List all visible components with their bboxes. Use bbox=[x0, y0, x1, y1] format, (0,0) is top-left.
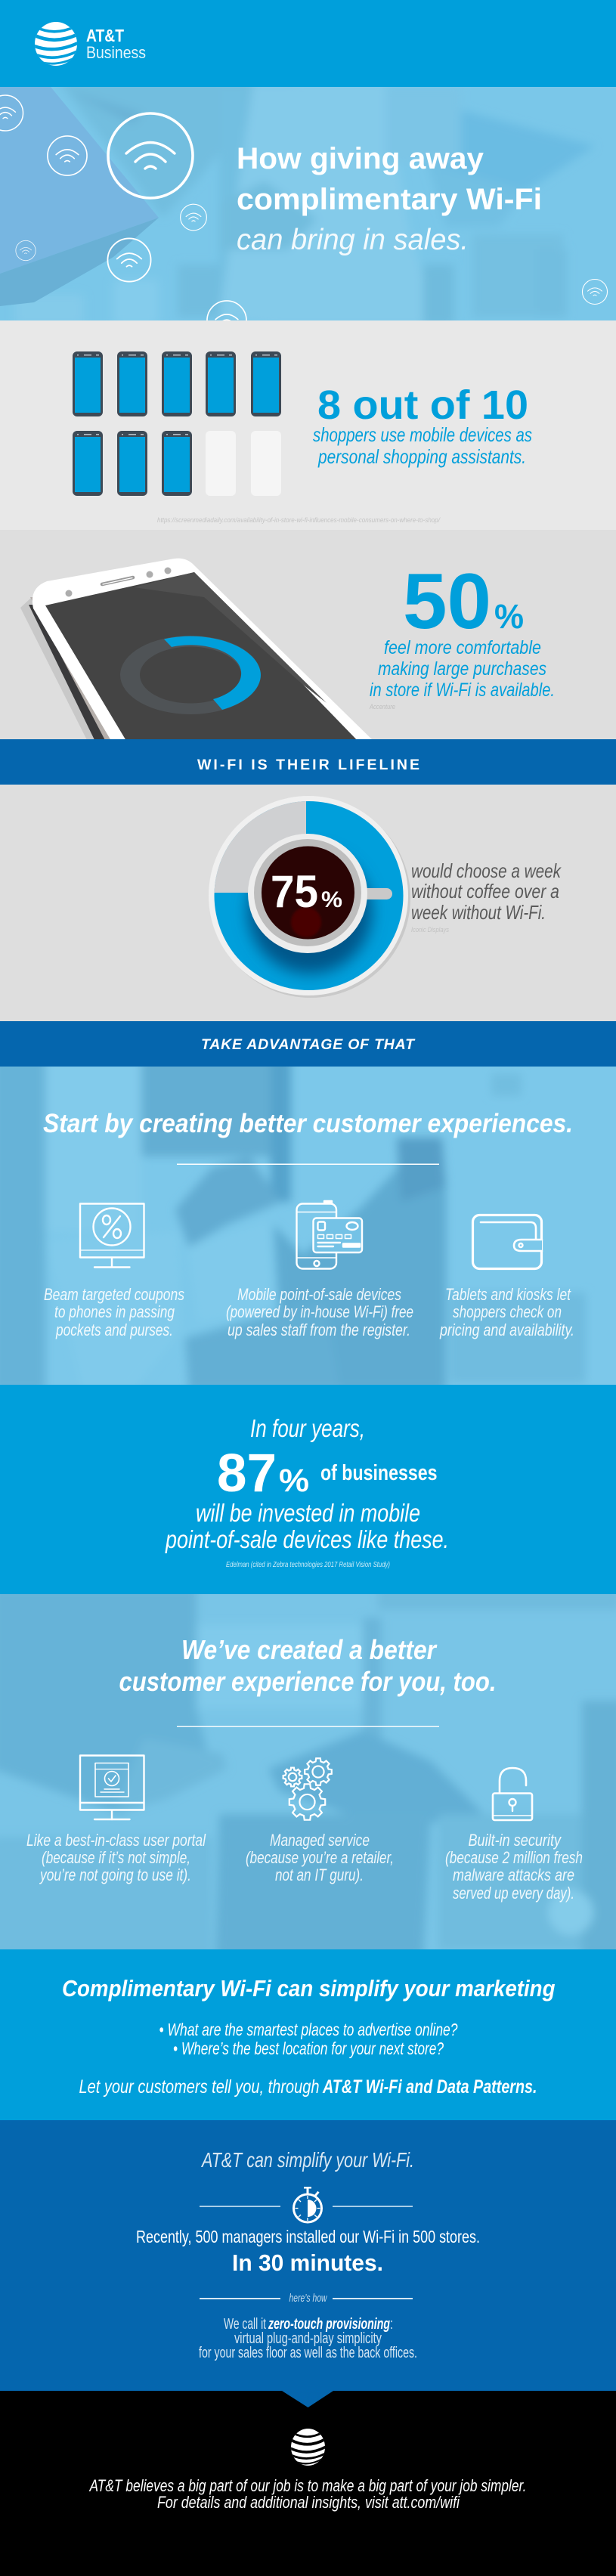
icon: wallet bbox=[473, 1215, 542, 1268]
coffee cup pie chart bbox=[209, 796, 410, 998]
panel: 75 percent coffee stat bbox=[0, 785, 616, 1021]
caption bbox=[411, 859, 562, 924]
subhead: AT&T can simplify your Wi-Fi. bbox=[200, 2148, 414, 2172]
intro line: In four years, bbox=[250, 1414, 365, 1442]
panel: 87 percent stat bbox=[0, 1385, 616, 1594]
stat caption bbox=[313, 423, 532, 468]
how it works: virtual plug-and-play simplicity bbox=[234, 2330, 382, 2347]
title: How giving away bbox=[237, 142, 484, 175]
questions: • Where’s the best location for your next store? bbox=[173, 2039, 444, 2058]
caption: without coffee over a bbox=[411, 880, 559, 903]
big number: % bbox=[279, 1463, 309, 1499]
captions: malware attacks are bbox=[453, 1865, 574, 1884]
closing text: For details and additional insights, visit att.com/wifi bbox=[157, 2493, 460, 2512]
logo wordmark: AT&T bbox=[86, 26, 124, 45]
captions: (because you’re a retailer, bbox=[246, 1848, 394, 1867]
panel: simplify your wi-fi bbox=[0, 2120, 616, 2391]
donut chart: 50 percent bbox=[120, 636, 261, 714]
questions bbox=[159, 2020, 458, 2058]
caption: will be invested in mobile bbox=[196, 1499, 420, 1527]
icon: mobile point-of-sale bbox=[296, 1201, 362, 1268]
captions bbox=[26, 1831, 583, 1903]
big number: 50 bbox=[403, 558, 491, 646]
icon: coupon on monitor bbox=[80, 1203, 144, 1267]
banner: wi-fi is their lifeline bbox=[0, 739, 616, 785]
captions: Managed service bbox=[270, 1831, 370, 1850]
cup handle bbox=[355, 888, 392, 899]
captions: Mobile point-of-sale devices bbox=[237, 1285, 401, 1304]
big number: 87 bbox=[217, 1444, 277, 1503]
captions: up sales staff from the register. bbox=[228, 1321, 410, 1339]
logo: AT&T globe bbox=[291, 2429, 325, 2466]
source: Edelman (cited in Zebra technologies 2017 Retail Vision Study) bbox=[226, 1561, 390, 1569]
stat heading: 8 out of 10 bbox=[317, 382, 528, 428]
panel: marketing bbox=[0, 1949, 616, 2120]
call to action bbox=[79, 2076, 537, 2098]
captions: not an IT guru). bbox=[275, 1865, 364, 1884]
wifi icons bbox=[0, 69, 608, 305]
call to action: Let your customers tell you, through bbox=[79, 2076, 319, 2098]
cup percent: 75 bbox=[271, 866, 318, 917]
source: Iconic Displays bbox=[411, 926, 449, 934]
stat caption: personal shopping assistants. bbox=[317, 445, 526, 468]
captions: (because 2 million fresh bbox=[445, 1848, 583, 1867]
how it works: We call it bbox=[224, 2316, 266, 2333]
how it works: : bbox=[390, 2316, 393, 2333]
captions: (because if it’s not simple, bbox=[42, 1848, 190, 1867]
cup bbox=[248, 834, 367, 953]
title bbox=[237, 142, 542, 256]
captions: (powered by in-house Wi-Fi) free bbox=[226, 1302, 413, 1321]
captions: pockets and purses. bbox=[55, 1321, 173, 1339]
questions: • What are the smartest places to advertise online? bbox=[159, 2020, 458, 2039]
panel: footer bbox=[89, 2391, 525, 2511]
banner: take advantage of that bbox=[0, 1021, 616, 1067]
title: complimentary Wi-Fi bbox=[237, 183, 542, 216]
large phone illustration bbox=[20, 559, 377, 745]
captions: served up every day). bbox=[453, 1884, 574, 1903]
caption: in store if Wi-Fi is available. bbox=[370, 680, 555, 701]
banner: take advantage of that: TAKE ADVANTAGE OF THAT bbox=[201, 1036, 416, 1053]
caption: making large purchases bbox=[378, 658, 546, 680]
heading: Start by creating better customer experiences. bbox=[43, 1109, 573, 1138]
captions: shoppers check on bbox=[453, 1302, 562, 1321]
captions: Tablets and kiosks let bbox=[445, 1285, 571, 1304]
panel: better customer experiences bbox=[0, 1058, 616, 1391]
captions: you’re not going to use it). bbox=[39, 1865, 191, 1884]
heading: Complimentary Wi-Fi can simplify your marketing bbox=[62, 1975, 556, 2002]
title: can bring in sales. bbox=[237, 224, 469, 256]
heading bbox=[119, 1634, 496, 1697]
divider bbox=[177, 1164, 439, 1165]
source: https://screenmediadaily.com/availability-of-in-store-wi-fi-influences-mobile-consumers-on-where-to-shop/ bbox=[157, 516, 441, 525]
stat caption: shoppers use mobile devices as bbox=[313, 423, 532, 446]
wifi icon clipped at section top bbox=[206, 300, 247, 320]
arrow: pointer bbox=[282, 2391, 333, 2407]
caption: would choose a week bbox=[411, 859, 562, 882]
call to action: AT&T Wi-Fi and Data Patterns. bbox=[322, 2076, 537, 2098]
panel: better customer experience for you bbox=[0, 1587, 616, 1958]
closing text bbox=[88, 2476, 527, 2512]
caption bbox=[165, 1499, 449, 1553]
source: Accenture bbox=[369, 703, 395, 711]
caption: week without Wi-Fi. bbox=[411, 901, 546, 924]
30 minutes: In 30 minutes. bbox=[232, 2249, 383, 2276]
captions: to phones in passing bbox=[54, 1302, 175, 1321]
panel: 50 percent stat bbox=[0, 530, 616, 745]
how it works: zero-touch provisioning bbox=[268, 2316, 390, 2333]
panel: hero bbox=[0, 69, 616, 325]
hero background photo (tinted) bbox=[0, 79, 616, 325]
logo wordmark bbox=[86, 26, 146, 62]
background photo (tinted) bbox=[0, 1587, 616, 1958]
how it works: for your sales floor as well as the back offices. bbox=[199, 2345, 417, 2361]
big number bbox=[217, 1444, 437, 1503]
background photo (tinted) bbox=[0, 1058, 616, 1391]
captions: Beam targeted coupons bbox=[44, 1285, 184, 1304]
icon: user portal monitor bbox=[80, 1755, 144, 1819]
stopwatch divider bbox=[200, 2187, 413, 2222]
icon: padlock bbox=[493, 1768, 532, 1820]
logo wordmark: Business bbox=[86, 43, 146, 62]
panel: 8 out of 10 stat bbox=[0, 301, 616, 530]
logo: AT&T globe bbox=[35, 22, 77, 66]
cup percent: % bbox=[321, 887, 342, 912]
icon: gears bbox=[283, 1758, 332, 1820]
captions: Built-in security bbox=[469, 1831, 562, 1850]
captions bbox=[44, 1285, 574, 1339]
banner: wi-fi is their lifeline: WI-FI IS THEIR LIFELINE bbox=[197, 757, 419, 773]
icon: stopwatch bbox=[293, 2187, 322, 2222]
big number: % bbox=[494, 597, 524, 636]
lead sentence: Recently, 500 managers installed our Wi-Fi in 500 stores. bbox=[136, 2227, 480, 2246]
here's how divider: here’s how bbox=[289, 2292, 327, 2305]
heading: We’ve created a better bbox=[181, 1634, 438, 1665]
big number: of businesses bbox=[320, 1461, 437, 1485]
caption bbox=[370, 637, 555, 701]
how it works bbox=[199, 2316, 417, 2361]
heading: customer experience for you, too. bbox=[119, 1666, 496, 1697]
caption: feel more comfortable bbox=[384, 637, 541, 658]
header band bbox=[0, 0, 616, 87]
divider bbox=[177, 1726, 439, 1727]
caption: point-of-sale devices like these. bbox=[165, 1525, 449, 1553]
captions: pricing and availability. bbox=[439, 1321, 574, 1339]
captions: Like a best-in-class user portal bbox=[26, 1831, 206, 1850]
phone grid pictogram bbox=[73, 351, 281, 496]
